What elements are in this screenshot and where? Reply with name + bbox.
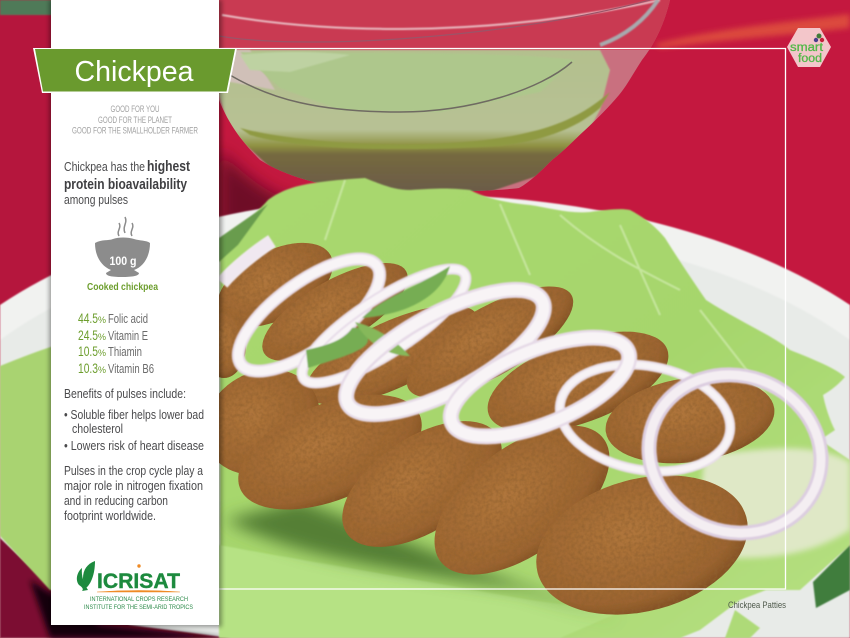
label: cooked chickpea: Cooked chickpea: [87, 281, 158, 293]
subtitle: good for you: GOOD FOR THE SMALLHOLDER FARMER: [72, 126, 198, 136]
subtitle: good for you: GOOD FOR THE PLANET: [98, 115, 172, 126]
text: protein headline: [64, 159, 190, 207]
nutrient: vitamin B6: %: [98, 365, 106, 375]
nutrient: folic acid: Folic acid: [108, 312, 148, 326]
logo: ICRISAT: INTERNATIONAL CROPS RESEARCH: [90, 596, 188, 603]
white photo frame line: [219, 48, 786, 589]
nutrient: vitamin E: 24.5: [78, 327, 98, 343]
title banner: Chickpea: Chickpea: [74, 56, 194, 88]
text: protein headline: protein bioavailability: [64, 177, 187, 193]
text: crop cycle: and in reducing carbon: [64, 493, 168, 508]
nutrient: thiamin: 10.5: [78, 343, 98, 359]
icon: smart food hexagon: smart: [790, 42, 824, 54]
nutrient: thiamin: [78, 343, 142, 359]
subtitle: good for you: [72, 104, 198, 136]
nutrient: thiamin: Thiamin: [108, 345, 142, 359]
mint leaves: [306, 266, 450, 368]
icon: smart food hexagon: food: [798, 53, 822, 65]
glass bowl with green chutney: [219, 0, 679, 195]
title banner: Chickpea: [33, 48, 237, 93]
text: protein headline: among pulses: [64, 192, 128, 207]
text: benefits of pulses: • Soluble fiber helps lower bad: [64, 407, 204, 422]
text: protein headline: Chickpea has the: [64, 159, 145, 174]
nutrient list: [78, 310, 154, 376]
subtitle: good for you: GOOD FOR YOU: [110, 104, 160, 115]
nutrient: thiamin: %: [98, 348, 106, 358]
text: benefits of pulses: Benefits of pulses include:: [64, 386, 186, 401]
icon: smart food hexagon: [787, 28, 831, 67]
caption: Chickpea Patties: Chickpea Patties: [728, 600, 786, 611]
icon: steaming bowl 100 g: 100 g: [110, 254, 136, 268]
onion rings: [222, 239, 843, 557]
text: crop cycle: [64, 463, 204, 523]
text: benefits of pulses: • Lowers risk of heart disease: [64, 438, 204, 453]
logo: ICRISAT: ICRISAT: [97, 570, 180, 593]
nutrient: folic acid: 44.5: [78, 310, 98, 326]
nutrient: folic acid: %: [98, 315, 106, 325]
text: crop cycle: Pulses in the crop cycle play a: [64, 463, 204, 478]
panel: sidebar: [49, 0, 222, 627]
nutrient: vitamin B6: 10.3: [78, 360, 98, 376]
text: crop cycle: footprint worldwide.: [64, 508, 156, 523]
logo: ICRISAT: [76, 561, 194, 611]
nutrient: vitamin E: Vitamin E: [108, 329, 148, 343]
icon: steaming bowl 100 g: [95, 217, 150, 277]
nutrient: folic acid: [78, 310, 148, 326]
nutrient: vitamin E: %: [98, 332, 106, 342]
nutrient: vitamin B6: [78, 360, 154, 376]
text: benefits of pulses: cholesterol: [72, 421, 123, 436]
logo: ICRISAT: INSTITUTE FOR THE SEMI-ARID TROPICS: [84, 604, 194, 611]
patties: [219, 242, 774, 615]
text: crop cycle: major role in nitrogen fixation: [64, 478, 203, 493]
plate: [0, 195, 850, 638]
nutrient: vitamin E: [78, 327, 148, 343]
lettuce: [0, 178, 850, 638]
text: benefits of pulses: [64, 386, 204, 453]
text: protein headline: highest: [147, 159, 190, 175]
nutrient: vitamin B6: Vitamin B6: [108, 362, 154, 376]
